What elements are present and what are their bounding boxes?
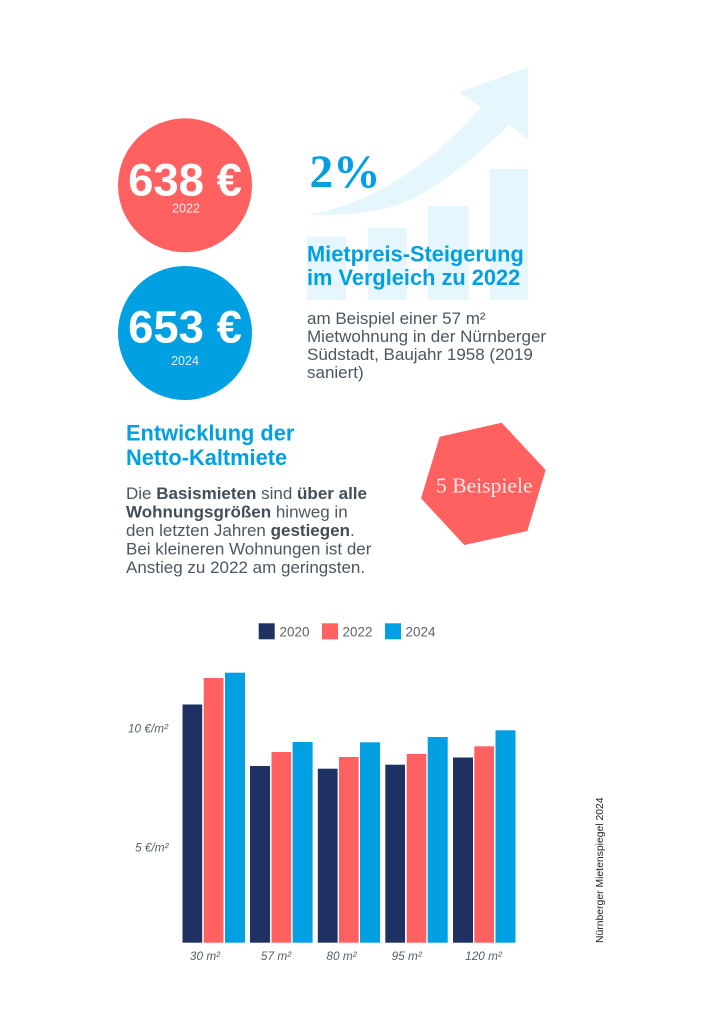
x axis labels: 95 m² xyxy=(392,949,423,963)
icon: rising arrow xyxy=(308,67,528,215)
circle: 2022 rent xyxy=(118,118,252,252)
circle: 2022 rent: 638 € xyxy=(128,154,242,206)
text block: development description: Wohnungsgrößen xyxy=(126,502,271,522)
big number: 2 percent: 2% xyxy=(310,146,380,198)
badge: 5 examples: 5 Beispiele xyxy=(436,474,533,498)
bars: 95 m² xyxy=(385,737,448,943)
heading: rent increase: im Vergleich zu 2022 xyxy=(307,265,520,290)
bars: 57 m² xyxy=(250,742,313,943)
bars: 30 m² xyxy=(182,673,245,943)
text block: example apartment: am Beispiel einer 57 m² xyxy=(307,309,486,328)
y axis labels: 5 €/m² xyxy=(135,841,170,855)
circle: 2024 rent: 2024 xyxy=(171,354,199,368)
heading: net cold rent development: Entwicklung der xyxy=(126,421,295,446)
circle: 2024 rent: 653 € xyxy=(128,302,242,352)
bars: 120 m² xyxy=(453,730,516,943)
x axis labels: 120 m² xyxy=(465,949,503,963)
source note: Nürnberger Mietenspiegel 2024 xyxy=(595,797,606,943)
bars: 80 m² xyxy=(318,742,380,943)
text block: example apartment: saniert) xyxy=(307,363,364,382)
chart legend xyxy=(259,623,436,640)
text block: development description: hinweg in xyxy=(276,502,348,522)
text block: development description: gestiegen. xyxy=(271,521,355,540)
background icon: rising arrow and bars xyxy=(307,67,528,300)
circle: 2022 rent: 2022 xyxy=(172,202,200,216)
text block: development description: den letzten Jahren xyxy=(126,521,271,540)
text block: development description: Bei kleineren Wohnungen ist der xyxy=(126,540,372,558)
heading: net cold rent development: Netto-Kaltmiete xyxy=(126,445,287,470)
chart legend: 2020 xyxy=(280,624,310,640)
x axis labels: 80 m² xyxy=(326,949,358,963)
badge: 5 examples xyxy=(421,423,546,545)
heading: rent increase: Mietpreis-Steigerung xyxy=(307,242,524,267)
x axis labels: 30 m² xyxy=(190,949,221,963)
text block: development description: Die Basismieten sind über alle xyxy=(126,484,367,503)
bar chart: rent per square metre xyxy=(128,673,516,963)
chart legend: 2024 xyxy=(406,624,436,640)
y axis labels: 10 €/m² xyxy=(128,722,169,736)
text block: example apartment: Mietwohnung in der Nürnberger xyxy=(307,327,546,346)
y axis labels xyxy=(128,722,170,855)
text block: example apartment: Südstadt, Baujahr 1958 (2019 xyxy=(307,345,533,364)
x axis labels: 57 m² xyxy=(261,949,292,963)
text block: development description: Anstieg zu 2022 am geringsten. xyxy=(126,558,365,577)
circle: 2024 rent xyxy=(118,266,252,400)
chart legend: 2022 xyxy=(342,624,372,640)
x axis labels xyxy=(190,949,503,963)
icon: background bars xyxy=(307,169,528,300)
